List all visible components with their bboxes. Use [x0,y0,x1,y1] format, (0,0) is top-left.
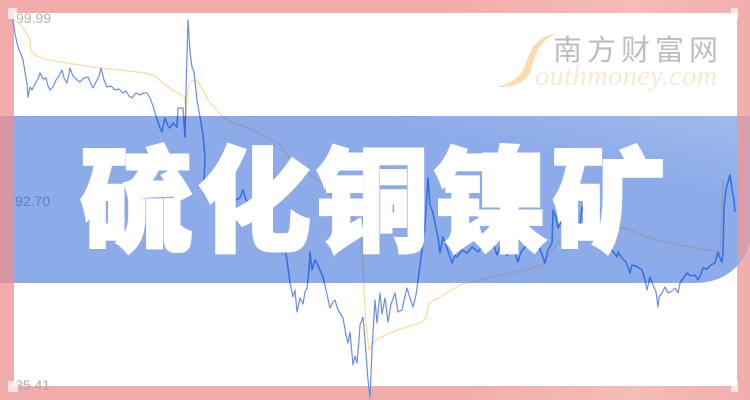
blue title band [0,116,750,283]
watermark domain: outhmoney.com [535,61,718,92]
watermark chinese name: 南方财富网 [553,34,723,67]
axis label: top value: 99.99 [16,10,51,26]
watermark: southmoney logo [498,33,723,92]
chart inside band [155,116,736,283]
price line inside band [155,116,736,283]
icon: logo swoosh [498,33,557,87]
band over pink frame: left [0,116,14,283]
axis label: bottom value: 85.41 [15,377,50,393]
moving average line [15,20,723,350]
band over pink frame: right [737,116,750,263]
axis label: middle value: 92.70 [15,193,50,209]
title: 硫化铜镍矿 [80,140,665,266]
moving average inside band [186,116,724,283]
